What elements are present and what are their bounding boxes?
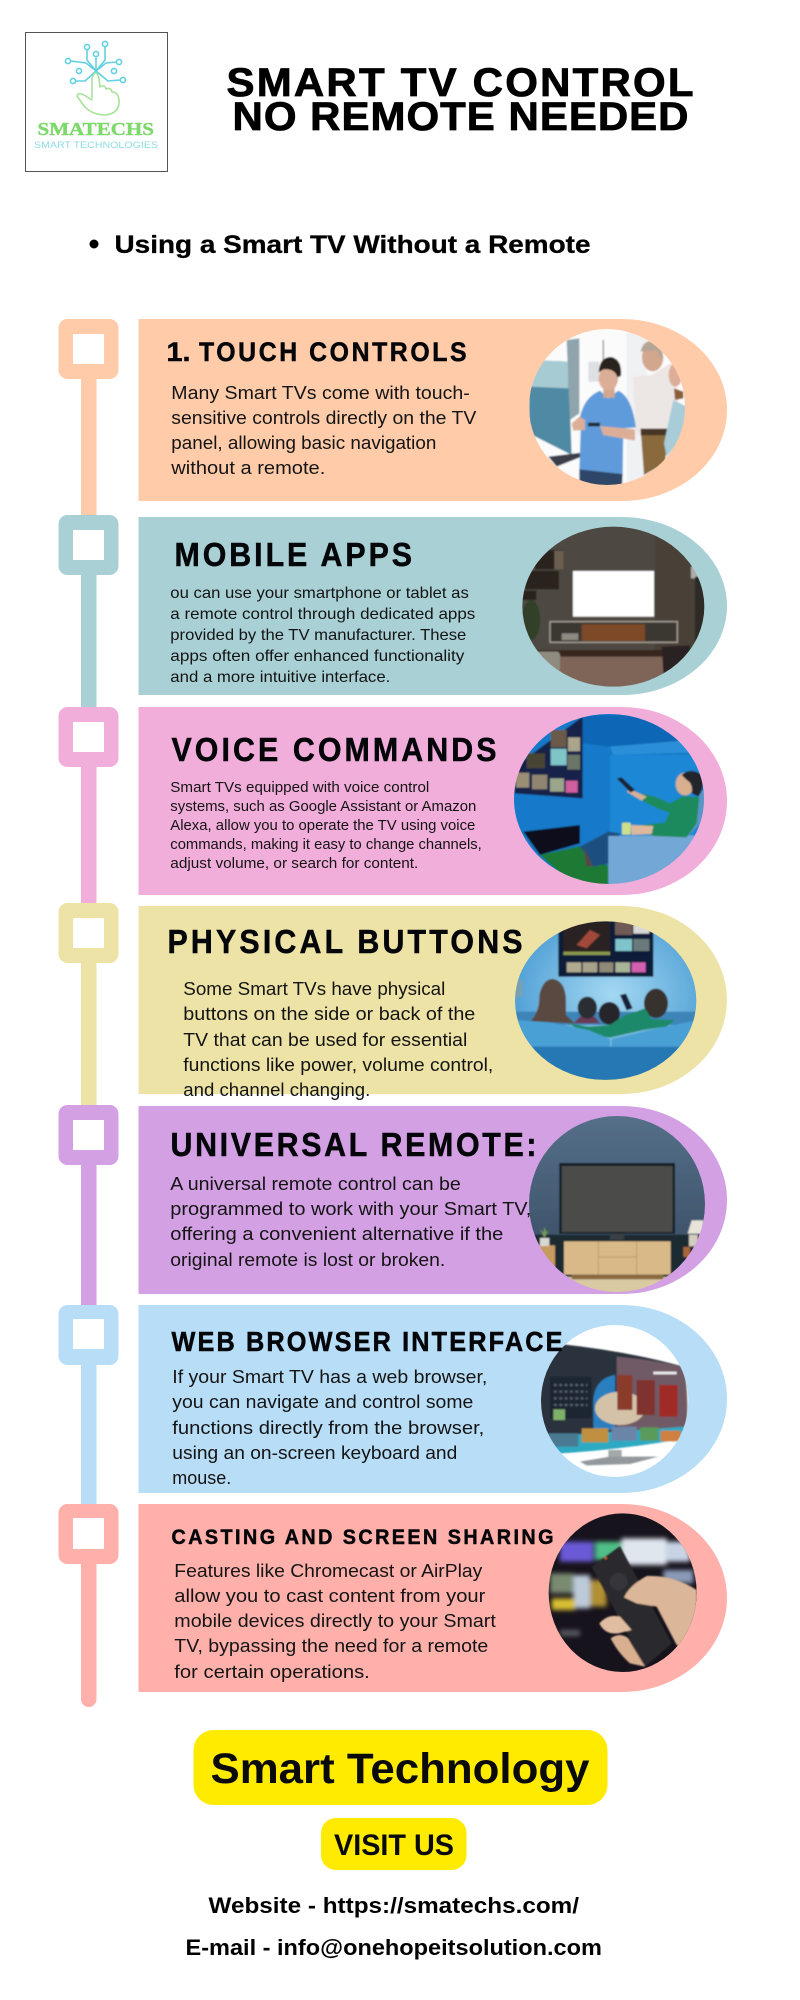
contact: website: Website - https://smatechs.com/ (208, 1893, 579, 1918)
logo (26, 32, 168, 172)
heading: WEB BROWSER INTERFACE (172, 1326, 562, 1357)
contact: email: E-mail - info@onehopeitsolution.com (186, 1935, 602, 1960)
button: visit us: VISIT US (334, 1829, 454, 1862)
photo: man with remote in blue room (514, 714, 704, 884)
body text: TV, bypassing the need for a remote (174, 1635, 488, 1656)
body text: If your Smart TV has a web browser, (172, 1366, 487, 1387)
logo wordmark: SMATECHS (38, 119, 154, 139)
body text: functions directly from the browser, (172, 1417, 484, 1438)
title (226, 60, 694, 139)
body text: panel, allowing basic navigation (171, 432, 436, 453)
body text: offering a convenient alternative if the (170, 1223, 503, 1244)
body text: functions like power, volume control, (183, 1054, 493, 1075)
heading: CASTING AND SCREEN SHARING (172, 1525, 553, 1549)
badge: smart technology: Smart Technology (210, 1746, 590, 1793)
photo: hand holding remote (548, 1513, 697, 1672)
body text (183, 978, 493, 1100)
body text: commands, making it easy to change channels, (170, 837, 482, 853)
heading: TOUCH CONTROLS (199, 338, 467, 367)
body text: and a more intuitive interface. (170, 669, 390, 686)
badge: smart technology (194, 1730, 608, 1805)
body text (170, 585, 475, 686)
body text (170, 382, 477, 478)
title: SMART TV CONTROL (226, 60, 694, 105)
subtitle bullet: Using a Smart TV Without a Remote (114, 231, 591, 259)
body text: A universal remote control can be (170, 1173, 461, 1194)
body text: allow you to cast content from your (174, 1585, 485, 1606)
body text: systems, such as Google Assistant or Amazon (170, 799, 476, 815)
body text: buttons on the side or back of the (183, 1003, 475, 1024)
photo: family on sofa (515, 921, 696, 1080)
body text: mouse. (172, 1467, 231, 1488)
body text: ou can use your smartphone or tablet as (170, 585, 469, 602)
body text: Many Smart TVs come with touch- (171, 382, 470, 403)
heading: 1. (166, 337, 190, 367)
panel: universal remote (138, 1106, 727, 1297)
body text: a remote control through dedicated apps (170, 606, 475, 623)
heading: VOICE COMMANDS (172, 731, 497, 768)
body text: using an on-screen keyboard and (172, 1442, 457, 1463)
body text: you can navigate and control some (172, 1391, 473, 1412)
body text (172, 1366, 487, 1488)
body text: TV that can be used for essential (183, 1029, 467, 1050)
body text: without a remote. (170, 457, 325, 478)
title: NO REMOTE NEEDED (232, 94, 689, 139)
button: visit us (321, 1818, 466, 1870)
body text (174, 1560, 496, 1682)
panel: physical buttons (138, 906, 727, 1100)
body text: Smart TVs equipped with voice control (170, 780, 429, 796)
body text: sensitive controls directly on the TV (171, 407, 477, 428)
panel: web browser interface (138, 1305, 727, 1493)
body text (170, 780, 482, 872)
body text: programmed to work with your Smart TV, (170, 1198, 531, 1219)
heading: MOBILE APPS (174, 536, 412, 573)
body text: provided by the TV manufacturer. These (170, 627, 466, 644)
heading: UNIVERSAL REMOTE: (170, 1126, 536, 1163)
photo: curved smart tv (539, 1325, 688, 1477)
body text (170, 1173, 531, 1270)
photo: family with tv (529, 329, 685, 485)
body text: mobile devices directly to your Smart (174, 1610, 496, 1631)
panel: voice commands (138, 707, 727, 895)
body text: Alexa, allow you to operate the TV using voice (170, 818, 475, 834)
body text: for certain operations. (174, 1661, 370, 1682)
logo tagline: SMART TECHNOLOGIES (34, 140, 158, 150)
body text: Features like Chromecast or AirPlay (174, 1560, 483, 1581)
panel: mobile apps (138, 517, 727, 695)
photo: tv on wooden console (529, 1116, 705, 1292)
heading: PHYSICAL BUTTONS (168, 923, 523, 960)
photo: living room (522, 526, 704, 687)
body text: and channel changing. (183, 1079, 370, 1100)
icon: circuit hand (65, 41, 126, 115)
body text: apps often offer enhanced functionality (170, 648, 464, 665)
body text: original remote is lost or broken. (170, 1249, 445, 1270)
panel: casting and screen sharing (138, 1504, 727, 1692)
body text: Some Smart TVs have physical (183, 978, 445, 999)
body text: adjust volume, or search for content. (170, 856, 418, 872)
timeline (58, 319, 118, 1707)
panel: touch controls (138, 319, 727, 501)
